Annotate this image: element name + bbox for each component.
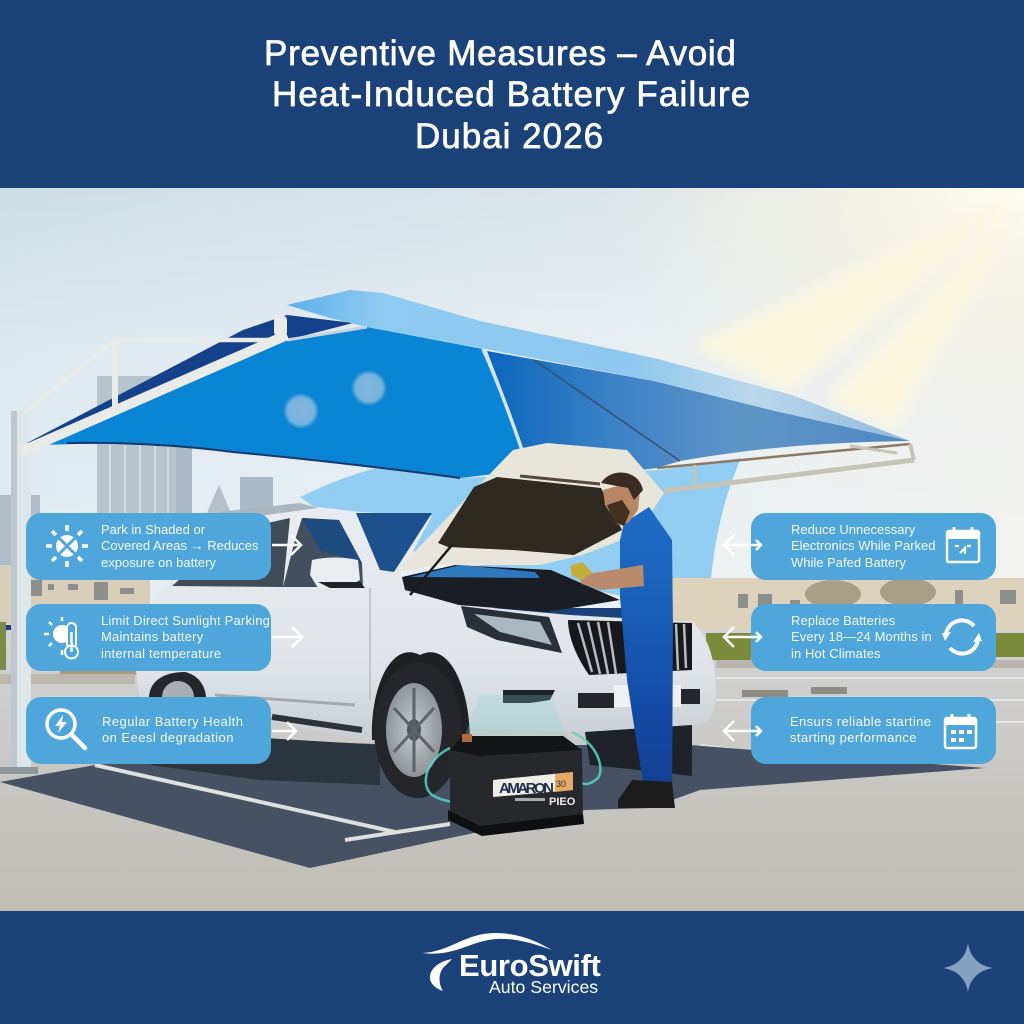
text: internal temperature	[101, 646, 221, 661]
icon: magnifier with bolt	[45, 708, 88, 750]
text: on Eeesl degradation	[102, 730, 234, 745]
title: Dubai 2026	[415, 117, 604, 156]
canopy	[27, 290, 910, 478]
text: Limit Direct Sunlight Parking	[101, 613, 270, 628]
card: regular battery health	[26, 697, 271, 764]
text: Reduce Unnecessary	[791, 522, 915, 537]
title	[264, 34, 751, 156]
text: While Pafed Battery	[791, 555, 906, 570]
engine bay	[402, 565, 620, 612]
battery glow	[426, 732, 600, 803]
boots	[618, 780, 675, 808]
pale blue fabric behind the car	[300, 458, 741, 600]
hedges	[0, 615, 1024, 697]
open hood	[394, 443, 664, 595]
windshield	[356, 513, 432, 572]
text: Covered Areas → Reduces	[101, 538, 259, 553]
rear side windows	[172, 518, 290, 587]
icon: calendar grid	[944, 714, 978, 750]
beard	[607, 500, 630, 526]
car body	[135, 505, 716, 742]
rear wheel	[149, 672, 206, 697]
face	[603, 484, 640, 525]
text: Electronics While Parked	[791, 538, 936, 553]
text	[791, 613, 932, 661]
battery	[448, 734, 584, 836]
battery: 30	[556, 779, 566, 789]
battery brand label: AMARON	[499, 780, 554, 797]
text: Park in Shaded or	[101, 522, 205, 537]
text: Maintains battery	[101, 629, 203, 644]
text	[790, 714, 931, 745]
text: starting performance	[790, 730, 917, 745]
rear frame arm	[657, 444, 914, 491]
light spots	[283, 393, 319, 429]
icon: sun crossed	[46, 525, 88, 567]
front wheel arch and wheel	[372, 652, 470, 740]
header band	[0, 0, 1024, 188]
canopy right panel	[487, 351, 910, 475]
text	[102, 714, 243, 745]
grille	[568, 620, 692, 675]
footer band	[0, 911, 1024, 1024]
icon: sun and thermometer	[44, 617, 79, 660]
canopy pale top band	[287, 290, 910, 441]
skyline towers	[0, 376, 706, 586]
card: replace batteries	[751, 604, 996, 671]
post	[0, 411, 38, 774]
icon: sparkle	[943, 943, 993, 992]
under-car shadow	[585, 725, 692, 776]
title: Preventive Measures – Avoid	[264, 34, 737, 73]
canopy shadow	[0, 740, 985, 868]
buildings	[0, 565, 1024, 635]
headlight	[461, 606, 562, 653]
text: Regular Battery Health	[102, 714, 243, 729]
forearm	[578, 565, 644, 590]
sky	[0, 188, 1024, 608]
card: limit direct sunlight	[26, 604, 271, 671]
steel frame	[20, 316, 287, 452]
hair	[601, 473, 643, 500]
text: exposure on battery	[101, 555, 216, 570]
car	[135, 503, 716, 798]
text: Replace Batteries	[791, 613, 895, 628]
text	[791, 522, 936, 570]
icon: refresh arrows	[942, 618, 982, 656]
card: park in shaded areas	[26, 513, 271, 580]
icon: calendar	[946, 527, 980, 564]
card: ensures reliable starting	[751, 697, 996, 764]
overalls	[620, 507, 673, 793]
text: in Hot Climates	[791, 646, 881, 661]
text	[101, 522, 259, 570]
front side window	[283, 518, 363, 587]
logo swoosh	[422, 933, 552, 991]
text: Every 18—24 Months in	[791, 629, 932, 644]
canopy main panel	[40, 327, 530, 478]
lower grille	[578, 693, 614, 708]
ground	[0, 630, 1024, 911]
door mirror	[310, 558, 360, 588]
handheld tester	[570, 562, 592, 580]
door trim and sill	[215, 695, 355, 705]
title: Heat-Induced Battery Failure	[272, 75, 751, 114]
number plate	[614, 685, 681, 707]
battery: PIEO	[549, 796, 576, 808]
logo tagline: Auto Services	[489, 977, 598, 997]
mechanic	[570, 473, 675, 808]
canopy dark rear band	[27, 315, 353, 448]
text: Ensurs reliable startine	[790, 714, 931, 729]
text	[101, 613, 270, 661]
pavement lines	[700, 678, 1024, 770]
fog lamp	[503, 690, 555, 703]
battery energy mist	[465, 695, 565, 735]
logo name: EuroSwift	[459, 948, 601, 983]
card: reduce electronics	[751, 513, 996, 580]
